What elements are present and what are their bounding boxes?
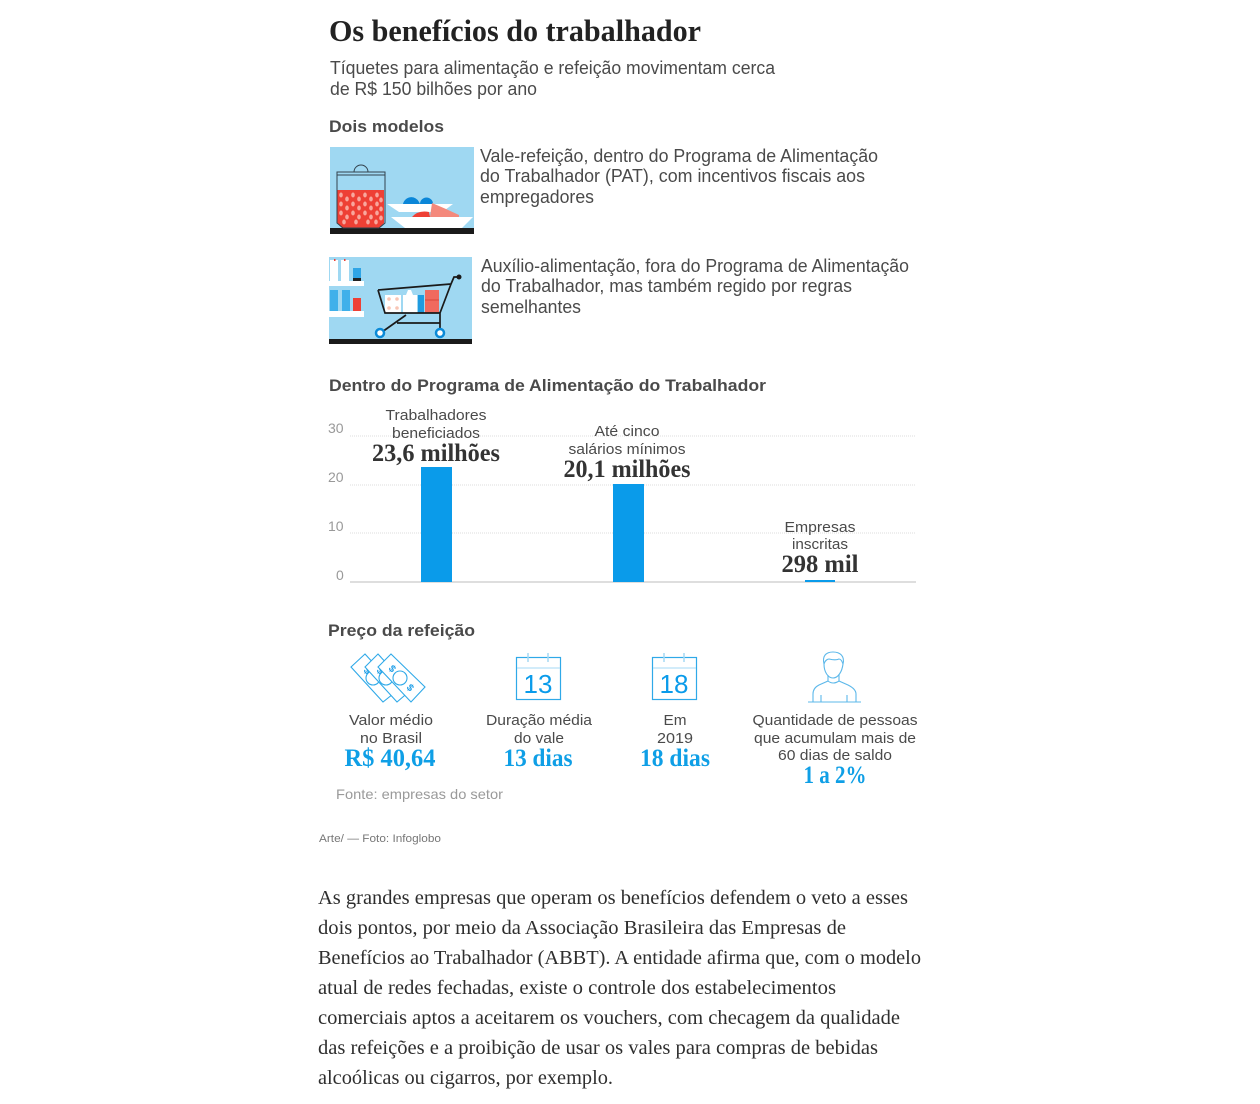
bar chart: 23,6 milhões [372, 440, 500, 467]
stat: valor médio [344, 712, 436, 772]
bar chart: Trabalhadores [386, 407, 486, 424]
bar chart: salários mínimos [568, 441, 686, 458]
article paragraph: das refeições e a proibição de usar os vales para compras de bebidas [318, 1037, 878, 1059]
bar chart: 0 [336, 567, 344, 583]
icon: calendar 18: 18 [660, 669, 688, 699]
stat: duração média [486, 712, 593, 772]
icon: calendar 18 [652, 653, 696, 700]
icon: banknotes: $ [386, 663, 398, 675]
bar chart: 20,1 milhões [564, 456, 691, 483]
illustration: shopping cart and shelves [329, 257, 472, 344]
subtitle [330, 58, 776, 99]
bar chart: 298 mil [782, 551, 859, 578]
icon: banknotes: $ [374, 665, 386, 677]
title: Os benefícios do trabalhador [329, 13, 701, 48]
icon: banknotes: $ [404, 682, 416, 694]
stat: quantidade de pessoas: Quantidade de pessoas [752, 712, 918, 729]
article paragraph: Benefícios ao Trabalhador (ABBT). A entidade afirma que, com o modelo [318, 947, 921, 969]
bar chart [328, 407, 916, 583]
text: auxílio-alimentação: semelhantes [481, 297, 581, 317]
bar chart: Até cinco [594, 423, 660, 440]
icon: banknotes [351, 654, 425, 702]
heading: dentro do programa: Dentro do Programa de Alimentação do Trabalhador [329, 376, 766, 395]
text: vale-refeição: empregadores [480, 187, 594, 207]
stat: quantidade de pessoas [752, 712, 918, 789]
stat: quantidade de pessoas: que acumulam mais de [754, 730, 916, 747]
stat: em 2019: Em [664, 712, 686, 729]
bar chart: Empresas [784, 519, 856, 536]
source: Fonte: empresas do setor [336, 786, 503, 802]
bar chart: 30 [328, 420, 344, 436]
icon: calendar 13: 13 [524, 669, 552, 699]
stat: quantidade de pessoas: 1 a 2% [804, 762, 866, 789]
text: vale-refeição [480, 146, 878, 207]
illustration: jar and plates [330, 147, 474, 234]
bar chart: 20 [328, 469, 344, 485]
photo credit: Arte/ — Foto: Infoglobo [319, 833, 441, 845]
icon: person [808, 652, 861, 702]
article paragraph: As grandes empresas que operam os benefícios defendem o veto a esses [318, 887, 908, 909]
bar chart: 10 [328, 518, 344, 534]
bar chart: inscritas [792, 536, 848, 553]
subtitle: de R$ 150 bilhões por ano [330, 79, 537, 99]
text: vale-refeição: Vale-refeição, dentro do Programa de Alimentação [480, 146, 878, 166]
stat: duração média: Duração média [486, 712, 593, 729]
stat: valor médio: no Brasil [360, 730, 422, 747]
stat: em 2019: 18 dias [640, 745, 710, 772]
stat: valor médio: Valor médio [349, 712, 433, 729]
stat: duração média: 13 dias [504, 745, 573, 772]
subtitle: Tíquetes para alimentação e refeição movimentam cerca [330, 58, 776, 78]
stat: em 2019: 2019 [657, 730, 693, 747]
article paragraph: dois pontos, por meio da Associação Brasileira das Empresas de [318, 917, 846, 939]
stat: quantidade de pessoas: 60 dias de saldo [778, 747, 892, 764]
heading: preço da refeição: Preço da refeição [328, 621, 475, 640]
icon: banknotes: $ [361, 665, 373, 677]
text: auxílio-alimentação: do Trabalhador, mas também regido por regras [481, 276, 852, 296]
heading: dois modelos: Dois modelos [329, 117, 444, 136]
stat: em 2019 [640, 712, 710, 772]
stat: valor médio: R$ 40,64 [344, 745, 436, 772]
article paragraph [318, 887, 921, 1089]
icon: calendar 13 [516, 653, 560, 700]
article paragraph: alcoólicas ou cigarros, por exemplo. [318, 1067, 613, 1089]
text: vale-refeição: do Trabalhador (PAT), com incentivos fiscais aos [480, 166, 865, 186]
bar chart: beneficiados [392, 425, 480, 442]
text: auxílio-alimentação [481, 256, 909, 317]
text: auxílio-alimentação: Auxílio-alimentação, fora do Programa de Alimentação [481, 256, 909, 276]
article paragraph: atual de redes fechadas, existe o controle dos estabelecimentos [318, 977, 836, 999]
stat: duração média: do vale [514, 730, 564, 747]
article paragraph: comerciais aptos a aceitarem os vouchers, com checagem da qualidade [318, 1007, 900, 1029]
